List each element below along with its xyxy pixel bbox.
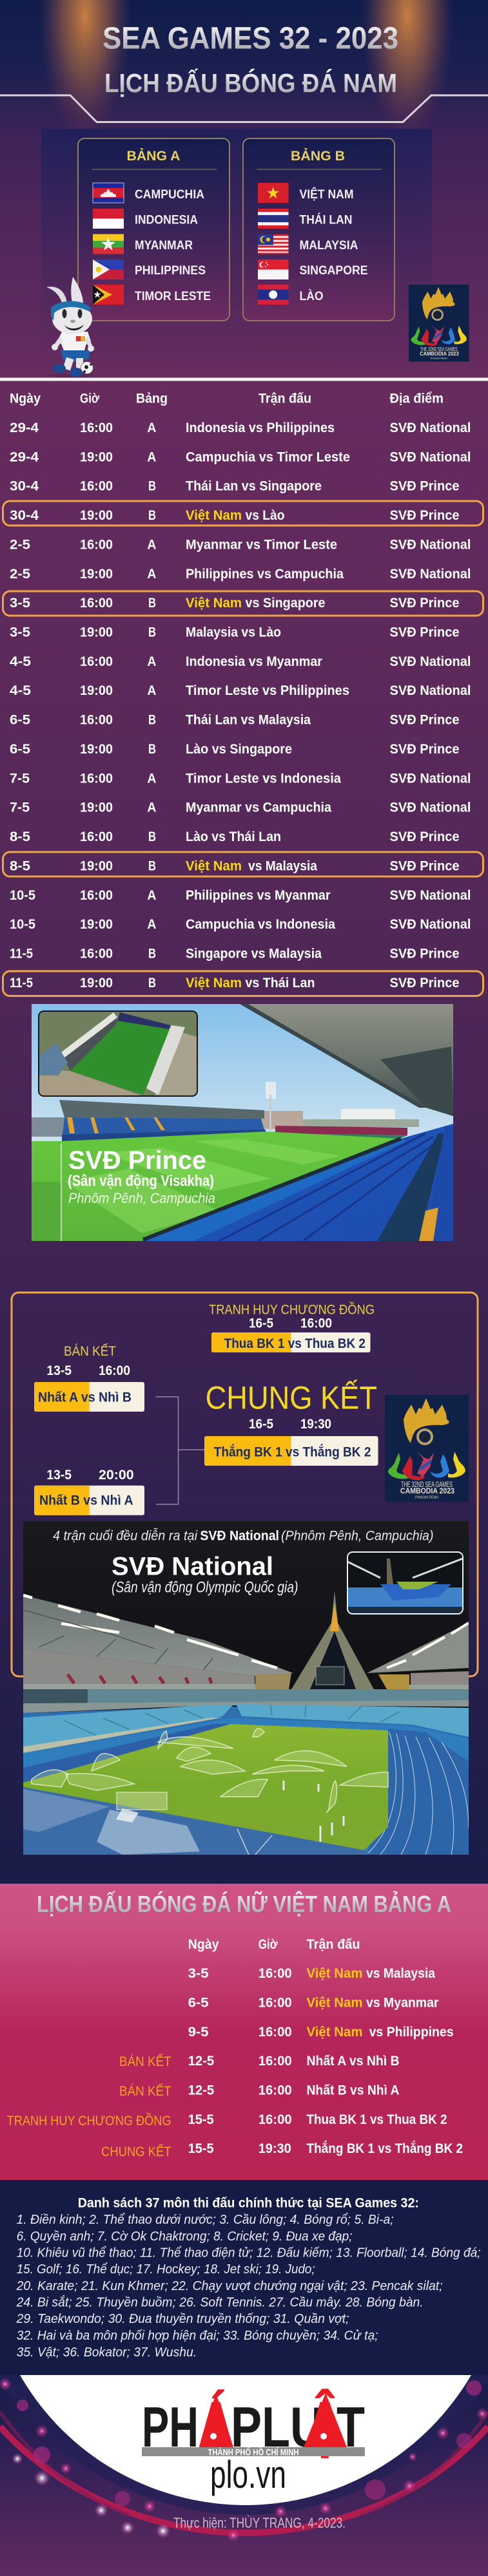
flag: Malaysia [258,234,289,254]
row 7: Vietnam highlight: vs Singapore [245,596,325,611]
row 18 [10,917,471,932]
bracket: bronze medal match [209,1302,375,1352]
row 14: Myanmar vs Campuchia [186,800,331,815]
row 4: Vietnam highlight: vs Lào [245,508,285,523]
row 13: SVĐ National [389,771,471,786]
flag: Philippines [93,260,124,279]
row 4: Vietnam highlight [3,501,483,526]
bracket: semi-final 1 [34,1344,144,1412]
heading: sports list: Danh sách 37 môn thi đấu chính thức tại SEA Games 32: [78,2195,419,2210]
row 16: Vietnam highlight: SVĐ Prince [389,858,459,873]
row 7: Vietnam highlight: B [148,596,156,611]
row 3 [188,2025,454,2040]
row 12: B [148,742,156,757]
table header [188,1937,360,1952]
row 2: 16:00 [259,1996,292,2011]
row 4: Vietnam highlight: Việt Nam [186,508,242,523]
row 2: A [147,450,156,464]
inset: National stadium night view [347,1552,463,1614]
row 2: vs Myanmar [366,1996,438,2011]
table header [10,392,444,406]
row 3: B [148,479,156,494]
row 19: 16:00 [80,947,113,961]
row 7: final: 19:30 [259,2141,291,2156]
footer white bowl [20,2375,471,2505]
row 5: A [147,537,156,552]
row 3 [10,479,459,494]
row 7: Vietnam highlight: Việt Nam [186,596,242,611]
flag: Indonesia [93,209,124,229]
panel: group A [78,138,229,321]
label: SVĐ Prince: SVĐ Prince [68,1146,206,1175]
label: Sân vận động Olympic Quốc gia: (Sân vận động Olympic Quốc gia) [112,1579,298,1596]
row 7: final: CHUNG KẾT [101,2145,171,2159]
logo: Pháp Luật: PLU [231,2395,324,2459]
row 16: Vietnam highlight: 8-5 [10,858,30,873]
row 7: final: 15-5 [188,2141,214,2156]
flag: Singapore [258,260,289,279]
row 19 [10,947,459,961]
label: Singapore: SINGAPORE [299,263,367,278]
bracket: bronze medal match: 16-5 [249,1316,273,1331]
logo: Pháp Luật: Ậ [305,2389,345,2461]
row 6 [10,567,471,582]
row 4: semi-final: Nhất A vs Nhì B [307,2054,400,2069]
row 17: 16:00 [80,888,113,903]
row 15 [10,829,459,844]
label: Việt Nam: VIỆT NAM [299,186,353,202]
row 1: Việt Nam [307,1966,362,1981]
text: sports list: 10. Khiêu vũ thể thao; 11. Thể thao điện tử; 12. Đấu kiếm; 13. Floorball; 14. Bóng đá; [17,2246,481,2260]
row 18: 10-5 [10,917,35,932]
row 16: Vietnam highlight: vs Malaysia [248,858,317,873]
icon: rabbit mascot with ball [46,277,95,377]
sprinkler arcs [32,1728,388,1813]
table header: Ngày [10,392,41,406]
spotlights [39,0,454,138]
text: sports list: 20. Karate; 21. Kun Khmer; 22. Chạy vượt chướng ngại vật; 23. Pencak silat; [16,2279,443,2293]
row 13: Timor Leste vs Indonesia [186,771,341,786]
icon: SEA Games logo (bracket): PHNOM PENH [415,1496,438,1500]
bracket: semi-final 2: Nhất B vs Nhì A [39,1493,133,1508]
bracket: semi-final 1: 16:00 [99,1363,130,1378]
credit: Thực hiện: THÙY TRANG, 4-2023. [173,2515,346,2531]
text: sports list [16,2213,481,2360]
row 2: SVĐ National [389,450,471,464]
row 20: Vietnam highlight [3,971,483,996]
row 13 [10,771,471,786]
row 14: SVĐ National [389,800,471,815]
row 12: SVĐ Prince [389,742,459,757]
row 2: 19:00 [80,450,113,464]
row 1 [188,1966,435,1981]
row 4: semi-final: 12-5 [188,2054,214,2069]
row 8: Malaysia vs Lào [186,625,281,640]
icon: SEA Games logo (group panel): THE 32ND SEA GAMES [420,346,458,352]
row 18: Campuchia vs Indonesia [186,917,335,932]
flag: Vietnam [258,183,289,203]
photo: Prince stadium [32,1004,453,1241]
photo: National stadium [23,1521,469,1855]
row 11: 16:00 [80,713,113,728]
row 17 [10,888,471,903]
header frame line [0,95,488,122]
row 5: semi-final: Nhất B vs Nhì A [307,2083,400,2098]
row 12: Lào vs Singapore [186,742,292,757]
logo: Pháp Luật [142,2389,365,2461]
row 4: Vietnam highlight: B [148,508,156,523]
logo: Pháp Luật: Á [198,2389,234,2461]
row 7: final: Thắng BK 1 vs Thắng BK 2 [307,2141,463,2156]
row 1: SVĐ National [389,421,471,435]
row 5: 2-5 [10,537,30,552]
flag: Thailand [258,209,289,229]
row 10: SVĐ National [389,683,471,698]
label: Sân vận động Visakha: (Sân vận động Visakha) [68,1173,214,1190]
row 20: Vietnam highlight: 19:00 [80,976,113,990]
label: Timor Leste: TIMOR LESTE [135,289,211,303]
row 20: Vietnam highlight: B [148,976,156,990]
row 4: Vietnam highlight: SVĐ Prince [389,508,459,523]
row 4: semi-final: BÁN KẾT [119,2054,171,2069]
title [102,22,398,98]
bracket: bronze medal match: 16:00 [300,1316,332,1331]
row 11: Thái Lan vs Malaysia [186,713,311,728]
row 17: Philippines vs Myanmar [186,888,330,903]
row 8: 19:00 [80,625,113,640]
row 1: vs Malaysia [366,1966,435,1981]
row 18: SVĐ National [389,917,471,932]
row 2: Việt Nam [307,1996,362,2011]
row 13: 7-5 [10,771,30,786]
row 1: 29-4 [10,421,39,435]
caption: final venue note: 4 trận cuối đều diễn ra tại [53,1529,198,1544]
table header: Bảng [136,392,168,406]
inset: aerial view [39,1011,197,1096]
row 5: Myanmar vs Timor Leste [186,537,337,552]
row 7: Vietnam highlight [3,591,483,616]
table header: Trận đấu [259,392,311,406]
bracket: semi-final 1: BÁN KẾT [64,1344,116,1359]
row 19: Singapore vs Malaysia [186,947,322,961]
row 7: Vietnam highlight: 16:00 [80,596,113,611]
row 11: 6-5 [10,713,30,728]
row 1: A [147,421,156,435]
row 14 [10,800,471,815]
row 9: Indonesia vs Myanmar [186,654,322,669]
row 18: 19:00 [80,917,113,932]
row 13: 16:00 [80,771,113,786]
row 4: semi-final: 16:00 [259,2054,292,2069]
row 6: 19:00 [80,567,113,582]
row 9: 16:00 [80,654,113,669]
label: SVĐ National: SVĐ National [112,1553,273,1581]
row 3: 30-4 [10,479,39,494]
row 6: 2-5 [10,567,30,582]
heading: group A: BẢNG A [126,149,181,164]
icon: SEA Games logo (bracket) [385,1395,469,1502]
background: schedule and finals gradient [0,379,488,1884]
row 17: 10-5 [10,888,35,903]
bracket: final: Thắng BK 1 vs Thắng BK 2 [214,1444,371,1460]
row 10 [10,683,471,698]
row 14: 7-5 [10,800,30,815]
text: sports list: 24. Bi sắt; 25. Thuyền buồm; 26. Soft Tennis. 27. Cầu mây. 28. Bóng bàn. [16,2295,424,2310]
row 10: 19:00 [80,683,113,698]
row 10: A [147,683,156,698]
icon: SEA Games logo (group panel): PHNOM PENH [431,357,447,360]
row 6: bronze medal: 16:00 [259,2112,292,2127]
table header: Địa điểm [389,392,444,406]
row 1 [10,421,471,435]
row 9: A [147,654,156,669]
panel: groups backdrop [41,129,432,377]
row 4: semi-final [119,2054,400,2069]
logo: Pháp Luật: THÀNH PHỐ HỒ CHÍ MINH [208,2448,299,2458]
row 11: SVĐ Prince [389,713,459,728]
row 15: SVĐ Prince [389,829,459,844]
row 19: 11-5 [10,947,33,961]
row 9: SVĐ National [389,654,471,669]
bracket: semi-final 2: 20:00 [99,1468,134,1482]
text: sports list: 35. Vật; 36. Bokator; 37. Wushu. [17,2345,197,2360]
title: SEA GAMES 32 - 2023 [102,22,398,55]
row 8: B [148,625,156,640]
row 2: 29-4 [10,450,39,464]
row 2: 6-5 [188,1996,209,2011]
bracket: bronze medal match: Thua BK 1 vs Thua BK 2 [224,1336,366,1351]
row 6: Philippines vs Campuchia [186,567,344,582]
row 1: Indonesia vs Philippines [186,421,335,435]
background: top header gradient [0,0,488,380]
icon: SEA Games logo (group panel): CAMBODIA 2023 [420,350,459,357]
icon: SEA Games logo (bracket): THE 32ND SEA GAMES [401,1480,453,1489]
bracket: final: 19:30 [300,1417,331,1432]
row 5: semi-final [119,2083,400,2099]
text: sports list: 1. Điền kinh; 2. Thể thao dưới nước; 3. Cầu lông; 4. Bóng rổ; 5. Bi-a; [17,2213,394,2227]
row 6: bronze medal: Thua BK 1 vs Thua BK 2 [307,2112,447,2127]
caption: final venue note: SVĐ National [200,1529,279,1544]
row 16: Vietnam highlight: 19:00 [80,858,113,873]
flag: Timor Leste [93,285,124,305]
bracket: semi-final 1: 13-5 [46,1363,72,1378]
row 8 [10,625,459,640]
row 6: A [147,567,156,582]
text: sports list: 29. Taekwondo; 30. Đua thuyền truyền thống; 31. Quần vợt; [16,2312,349,2326]
row 3: 16:00 [259,2025,292,2040]
row 17: A [147,888,156,903]
label: Malaysia: MALAYSIA [299,238,358,252]
row 5: 16:00 [80,537,113,552]
row 3: SVĐ Prince [389,479,459,494]
title: LỊCH ĐẤU BÓNG ĐÁ NAM [104,68,397,98]
row 9: 4-5 [10,654,31,669]
row 6: bronze medal: 15-5 [188,2112,214,2127]
row 14: A [147,800,156,815]
row 4: Vietnam highlight: 19:00 [80,508,113,523]
row 1: 16:00 [80,421,113,435]
row 6: bronze medal [7,2112,447,2128]
row 3: 9-5 [188,2025,209,2040]
row 6: SVĐ National [389,567,471,582]
row 13: A [147,771,156,786]
row 11 [10,713,459,728]
row 2: Campuchia vs Timor Leste [186,450,350,464]
row 7: Vietnam highlight: SVĐ Prince [389,596,459,611]
bracket: bronze medal match: TRANH HUY CHƯƠNG ĐỒNG [209,1302,375,1318]
row 3: vs Philippines [369,2025,454,2040]
row 12 [10,742,459,757]
text: plo.vn: plo.vn [210,2453,286,2496]
label: Philippines: PHILIPPINES [135,263,206,278]
label: Campuchia: CAMPUCHIA [135,187,204,202]
row 2 [188,1996,438,2011]
row 12: 6-5 [10,742,30,757]
row 20: Vietnam highlight: SVĐ Prince [389,976,459,990]
caption: final venue note: (Phnôm Pênh, Campuchia) [281,1529,433,1544]
row 1: 3-5 [188,1966,209,1981]
row 8: SVĐ Prince [389,625,459,640]
label: Myanmar: MYANMAR [135,238,193,252]
table header: Giờ [80,392,99,406]
divider: white line [0,377,488,381]
flag: Cambodia [93,183,124,203]
table header: Giờ [259,1937,278,1952]
table header: Ngày [188,1937,219,1952]
text: sports list: 32. Hai và ba môn phối hợp hiện đại; 33. Bóng chuyền; 34. Cử tạ; [17,2329,378,2343]
row 15: 8-5 [10,829,30,844]
bracket: semi-final 2 [34,1468,144,1515]
panel: knockout bracket frame [12,1293,478,1676]
row 5: SVĐ National [389,537,471,552]
row 16: Vietnam highlight: B [148,858,156,873]
row 9 [10,654,471,669]
row 20: Vietnam highlight: vs Thái Lan [245,976,315,990]
bracket connector arrow lines [155,1397,204,1504]
row 1: 16:00 [259,1966,292,1981]
text: sports list: 15. Golf; 16. Thể dục; 17. Hockey; 18. Jet ski; 19. Judo; [17,2262,315,2277]
text: sports list: 6. Quyền anh; 7. Cờ Ok Chaktrong; 8. Cricket; 9. Đua xe đạp; [17,2230,353,2244]
label: Phnôm Pênh, Campuchia: Phnôm Pênh, Campuchia [68,1190,215,1206]
row 3: 16:00 [80,479,113,494]
row 20: Vietnam highlight: Việt Nam [186,976,242,990]
row 6: bronze medal: TRANH HUY CHƯƠNG ĐỒNG [7,2113,171,2128]
row 12: 19:00 [80,742,113,757]
row 19: SVĐ Prince [389,947,459,961]
row 17: SVĐ National [389,888,471,903]
footer background [0,2375,488,2576]
row 5: semi-final: 12-5 [188,2083,214,2098]
row 11: B [148,713,156,728]
flag: Laos [258,285,289,305]
row 8: 3-5 [10,625,30,640]
panel: group B [243,138,395,321]
row 10: 4-5 [10,683,31,698]
row 5: semi-final: BÁN KẾT [119,2084,171,2099]
row 16: Vietnam highlight: Việt Nam [186,858,242,873]
table: men's group schedule [3,392,483,996]
row 3: Thái Lan vs Singapore [186,479,322,494]
icon: SEA Games logo (group panel) [409,285,469,362]
panel: sports list [0,2180,488,2376]
logo: Pháp Luật: T [337,2395,365,2459]
bracket: semi-final 2: 13-5 [46,1468,72,1482]
heading: group B: BẢNG B [291,149,345,164]
row 2 [10,450,471,464]
row 15: B [148,829,156,844]
row 10: Timor Leste vs Philippines [186,683,349,698]
label: Lào: LÀO [299,289,324,303]
bracket: final: CHUNG KẾT [206,1379,377,1416]
row 3: Việt Nam [307,2025,362,2040]
row 4: Vietnam highlight: 30-4 [10,508,39,523]
row 5: semi-final: 16:00 [259,2083,292,2098]
logo: Pháp Luật: PH [142,2395,199,2459]
bracket: semi-final 1: Nhất A vs Nhì B [38,1390,132,1405]
row 19: B [148,947,156,961]
bracket: final [204,1379,378,1466]
label: Indonesia: INDONESIA [135,213,198,227]
panel: women's schedule [0,1884,488,2180]
flag: Myanmar [93,234,124,254]
row 15: 16:00 [80,829,113,844]
bracket: final: 16-5 [249,1417,273,1432]
row 7: Vietnam highlight: 3-5 [10,596,30,611]
label: Thái Lan: THÁI LAN [299,213,352,227]
row 7: final [101,2141,463,2159]
row 5 [10,537,471,552]
icon: SEA Games logo (bracket): CAMBODIA 2023 [400,1486,454,1495]
row 16: Vietnam highlight [3,852,483,876]
row 20: Vietnam highlight: 11-5 [10,976,33,990]
table header: Trận đấu [307,1937,360,1952]
row 18: A [147,917,156,932]
row 15: Lào vs Thái Lan [186,829,281,844]
row 14: 19:00 [80,800,113,815]
